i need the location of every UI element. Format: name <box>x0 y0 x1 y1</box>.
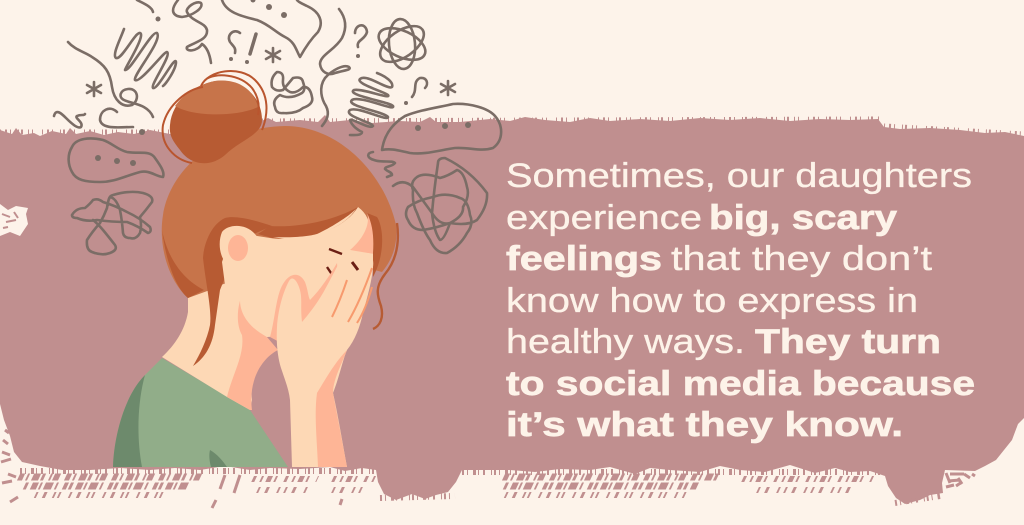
line 7: it’s what they know. <box>506 406 903 444</box>
scribble: c curve <box>100 109 133 127</box>
texture: serrated bottom edge <box>20 471 940 503</box>
forehead highlight <box>273 209 356 240</box>
hair strand across forehead <box>258 207 358 239</box>
line 1: Sometimes, our daughters <box>506 157 972 195</box>
texture: dense flecks <box>10 477 719 495</box>
ear <box>220 226 258 268</box>
line 5: healthy ways. <box>506 323 745 361</box>
panel: torn mauve brush stroke <box>0 115 1024 508</box>
line 5: They turn <box>755 323 941 361</box>
coil right <box>349 73 393 135</box>
hair <box>162 126 396 298</box>
scribble: wavy line <box>320 9 350 126</box>
knot flower <box>374 18 430 70</box>
hair shadow <box>162 230 204 298</box>
finger creases <box>332 268 372 323</box>
knot large left <box>72 192 152 254</box>
shirt shadow <box>113 375 227 467</box>
texture: serrated top edge <box>0 119 1024 134</box>
hair bun <box>170 81 262 163</box>
side lock of hair <box>193 217 272 366</box>
squiggle under bubble <box>368 152 395 177</box>
line 4: know how to express in <box>506 282 918 320</box>
hair on right of face <box>367 213 382 277</box>
bun outline strokes <box>163 71 266 163</box>
asterisk left <box>87 82 101 96</box>
scribble: small z <box>54 112 85 127</box>
line 3: feelings <box>506 240 662 278</box>
line 2: big, scary <box>709 199 897 237</box>
speech blob top <box>222 0 321 57</box>
line 5 <box>506 323 941 361</box>
question mark small <box>355 25 367 47</box>
line 2: experience <box>506 199 702 237</box>
hand and arm <box>277 250 373 467</box>
scribble: top squiggle <box>137 0 153 12</box>
line 6: to social media because <box>506 365 975 403</box>
asterisk right <box>441 81 455 95</box>
speech bubble right <box>382 104 501 153</box>
bun highlight <box>175 81 258 114</box>
scribble: top curl <box>173 0 211 63</box>
asterisk center <box>266 48 280 62</box>
line 3 <box>506 240 933 278</box>
knot large right <box>393 158 487 253</box>
line 3: that they don’t <box>671 240 933 278</box>
question mark right <box>412 78 427 97</box>
face <box>222 207 375 337</box>
texture: loose flecks <box>1 430 342 508</box>
arm shadow <box>316 350 347 467</box>
speech bubble left <box>69 138 163 182</box>
hand shadow outline <box>270 263 340 345</box>
closed eye <box>327 249 342 276</box>
face shadow near hair <box>350 213 374 254</box>
shirt <box>113 358 288 467</box>
eyelash behind fingers <box>352 262 358 270</box>
text block: message <box>506 157 975 444</box>
doodle dots <box>95 0 471 166</box>
texture: torn left notch flecks <box>2 212 18 228</box>
doodles: scribbles around head <box>54 0 501 254</box>
neck <box>162 280 267 410</box>
illustration: woman covering her face <box>113 71 398 467</box>
texture: sparse flecks <box>248 479 873 490</box>
inner ear <box>228 235 248 261</box>
scribble: long loop line <box>68 42 153 117</box>
knot small <box>272 72 312 113</box>
neck shadow <box>227 288 278 410</box>
loose strand <box>373 223 398 329</box>
question mark <box>229 31 240 53</box>
scribble: zigzag coil <box>115 29 176 88</box>
exclamation mark <box>250 34 256 54</box>
texture: flecks near right edge <box>946 473 975 487</box>
line 2 <box>506 199 897 237</box>
